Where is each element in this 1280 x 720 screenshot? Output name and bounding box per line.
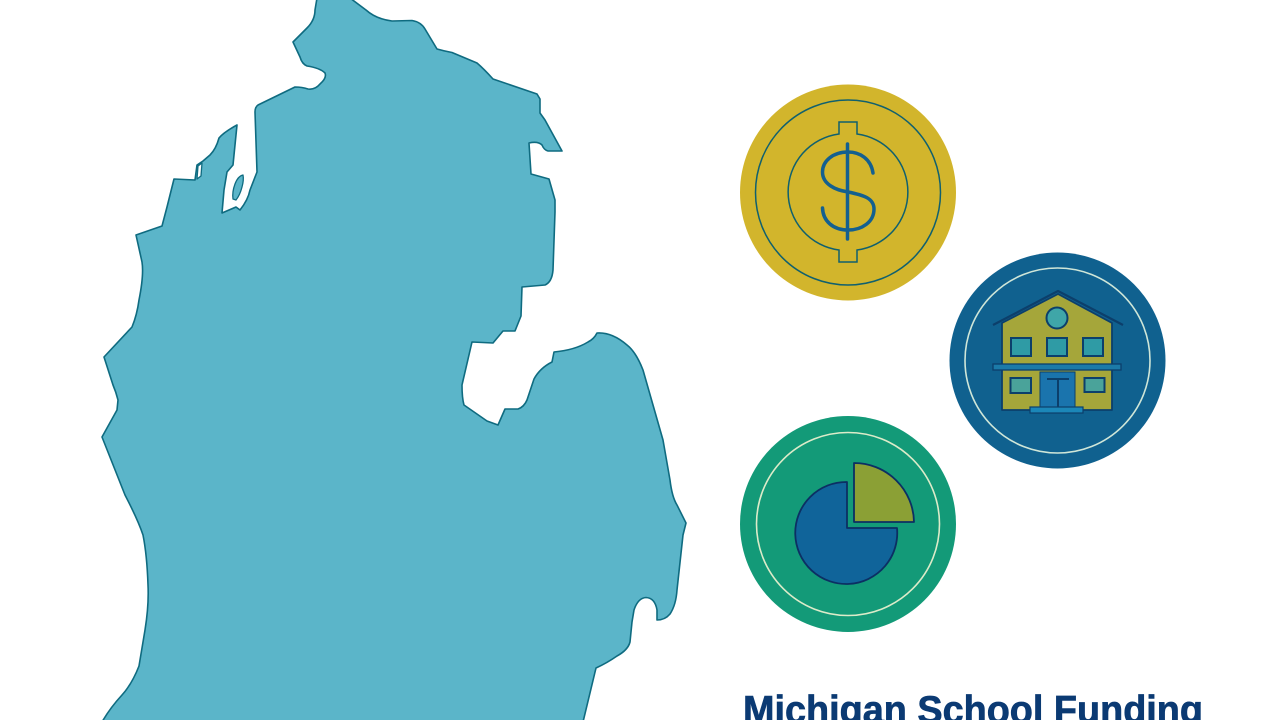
school roof xyxy=(993,291,1123,325)
school clock xyxy=(1046,308,1068,328)
school door xyxy=(1040,372,1075,407)
school lower windows xyxy=(1010,378,1104,393)
map: Michigan lower peninsula xyxy=(102,0,686,720)
school steps xyxy=(1030,407,1083,413)
icon: blue school building xyxy=(950,252,1166,468)
dollar sign xyxy=(822,144,874,239)
map: bay notch xyxy=(197,163,202,179)
school upper windows xyxy=(1011,338,1103,356)
icon: gold dollar coin xyxy=(740,84,956,300)
map: lake island xyxy=(233,175,243,200)
school walls xyxy=(1002,294,1112,410)
pie small slice xyxy=(854,463,914,522)
pie large slice xyxy=(795,482,897,584)
school ledge xyxy=(993,364,1121,370)
icon: green pie chart badge xyxy=(740,416,956,632)
